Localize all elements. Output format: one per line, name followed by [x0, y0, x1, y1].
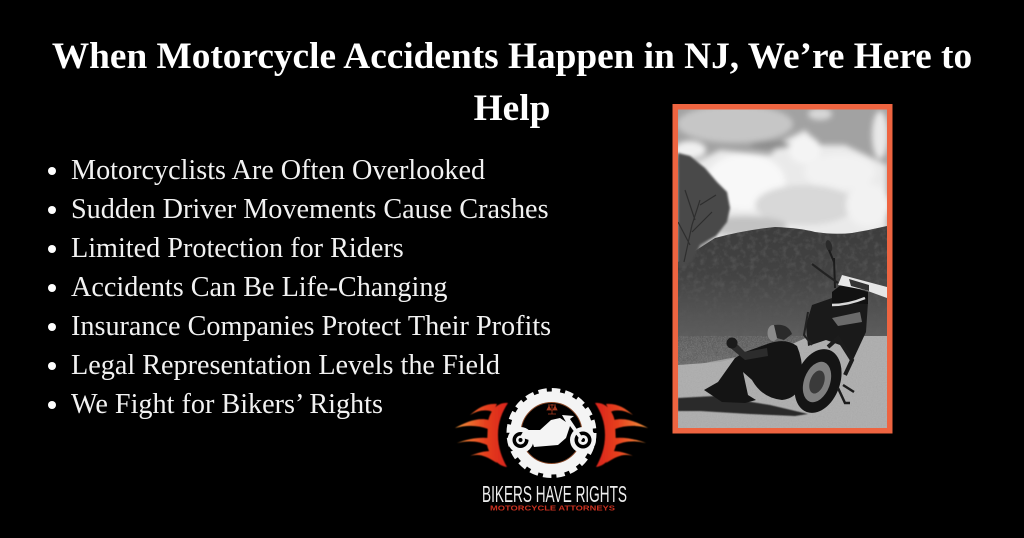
bullet list: Sudden Driver Movements Cause Crashes [71, 194, 549, 225]
left flames [455, 403, 508, 467]
shadow [678, 396, 808, 416]
rider [704, 325, 802, 403]
bullet list: Motorcyclists Are Often Overlooked [71, 155, 485, 186]
photo: rider sitting beside motorcycle [672, 104, 892, 434]
bullet list: We Fight for Bikers’ Rights [71, 389, 383, 420]
bullet list [48, 155, 551, 420]
scales of justice icon [547, 404, 557, 414]
motorcycle silhouette [508, 415, 596, 453]
logo: Bikers Have Rights [455, 390, 648, 512]
logo wordmark: BIKERS HAVE RIGHTS [482, 481, 627, 507]
bullet list: Legal Representation Levels the Field [71, 350, 500, 381]
bullet list: Insurance Companies Protect Their Profits [71, 311, 551, 342]
motorcycle [794, 240, 887, 413]
tree [678, 153, 730, 268]
bullet list: Accidents Can Be Life-Changing [71, 272, 448, 303]
title: When Motorcycle Accidents Happen in NJ, We’re Here to [52, 36, 972, 77]
gear [509, 390, 594, 476]
photo frame [672, 104, 892, 434]
hills [678, 226, 887, 368]
logo tagline: MOTORCYCLE ATTORNEYS [490, 506, 615, 512]
bullet list: Limited Protection for Riders [71, 233, 404, 264]
clouds [674, 105, 890, 240]
right flames [595, 403, 648, 467]
title [52, 36, 972, 129]
title: Help [474, 88, 550, 129]
road [678, 336, 887, 428]
